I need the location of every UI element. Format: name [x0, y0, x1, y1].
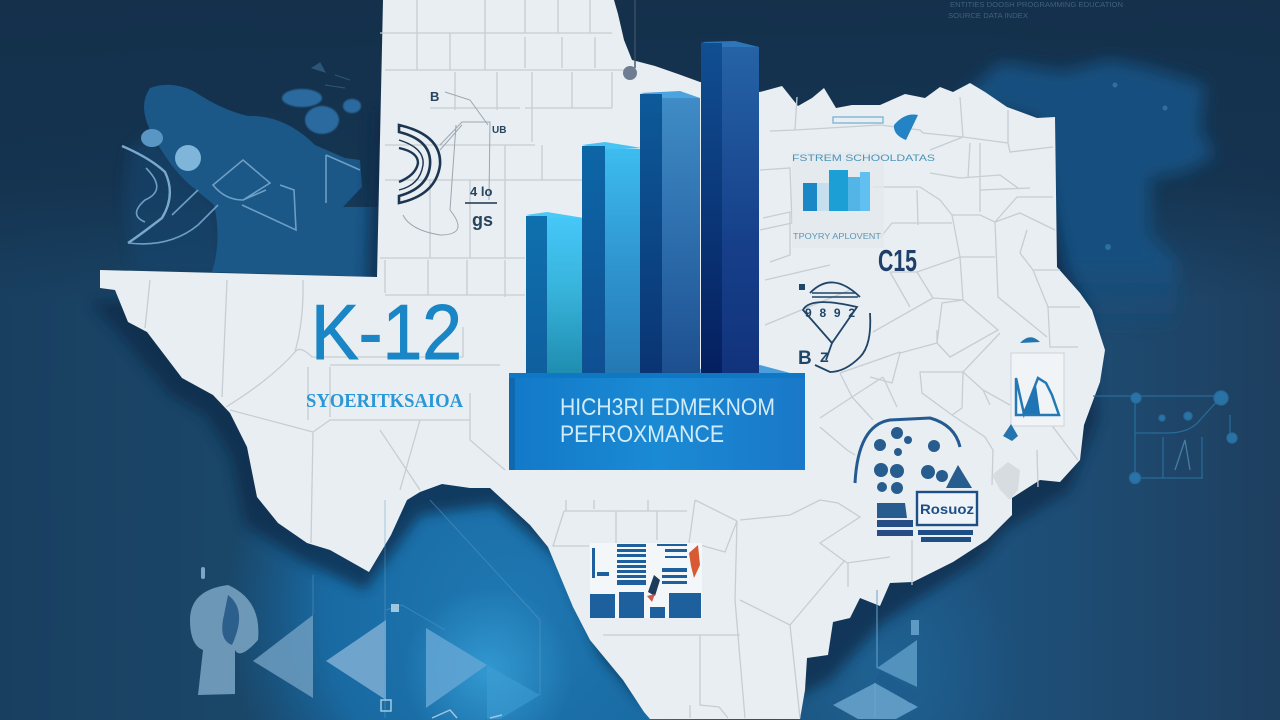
decorative arrows: triangles: [190, 500, 540, 719]
north east: [760, 97, 1080, 357]
icon: arcs and sketch: 4 lo: [470, 184, 492, 199]
icon: mini bar chart panel: TPOYRY APLOVENT: [793, 232, 881, 241]
central south: [553, 500, 845, 718]
panhandle grid: [380, 33, 628, 295]
plinth label: [560, 394, 775, 448]
icon: building card: [1003, 337, 1064, 441]
icon: balloon emblem: 9892: [805, 306, 855, 320]
icon: newspaper collage: [590, 543, 702, 618]
pin marker: [623, 0, 637, 80]
map shadow: [90, 80, 1098, 700]
Texas map: [90, 0, 1105, 719]
south east: [820, 330, 1078, 587]
icon: arcs and sketch: [399, 89, 506, 235]
bar chart: [526, 41, 759, 373]
icon: arcs and sketch: B: [430, 89, 439, 104]
plinth label: PEFROXMANCE: [560, 421, 724, 448]
west: [145, 280, 505, 543]
faint top right caption: ENTITIES DOOSH PROGRAMMING EDUCATION: [950, 2, 1123, 9]
decorative network diagram: [1093, 391, 1237, 484]
bar 2: [582, 142, 642, 373]
bar 1: [526, 212, 584, 373]
plinth label: HICH3RI EDMEKNOM: [560, 394, 775, 421]
icon: arcs and sketch: UB: [492, 125, 506, 136]
icon: balloon emblem: B: [798, 348, 812, 369]
icon: campus illustration: Rosuoz: [920, 501, 974, 517]
bar 4: [701, 41, 759, 373]
icon: mini bar chart panel: [792, 114, 935, 248]
decorative bottom right triangles: [833, 590, 919, 719]
icon: balloon emblem: Z: [820, 349, 829, 365]
map landmass: [100, 0, 1105, 719]
faint top right caption: SOURCE DATA INDEX: [948, 13, 1028, 20]
decorative right cloud shape: [960, 60, 1215, 330]
icon: balloon emblem: [798, 282, 870, 372]
icon: arcs and sketch: gs: [472, 210, 493, 230]
bar chart plinth: [509, 365, 805, 470]
faint top right caption: [948, 2, 1123, 20]
icon: campus illustration: [855, 418, 977, 542]
K-12 heading: K-12: [311, 288, 462, 376]
county lines: [145, 0, 1080, 718]
icon: mini bar chart panel: FSTREM SCHOOLDATAS: [792, 153, 935, 163]
K-12 subheading: SYOERITKSAIOA: [306, 390, 464, 412]
bar 3: [640, 91, 700, 373]
gray bay area: [992, 462, 1020, 500]
decorative left world shape: [122, 63, 378, 277]
icon: number badge: C15: [878, 243, 917, 278]
